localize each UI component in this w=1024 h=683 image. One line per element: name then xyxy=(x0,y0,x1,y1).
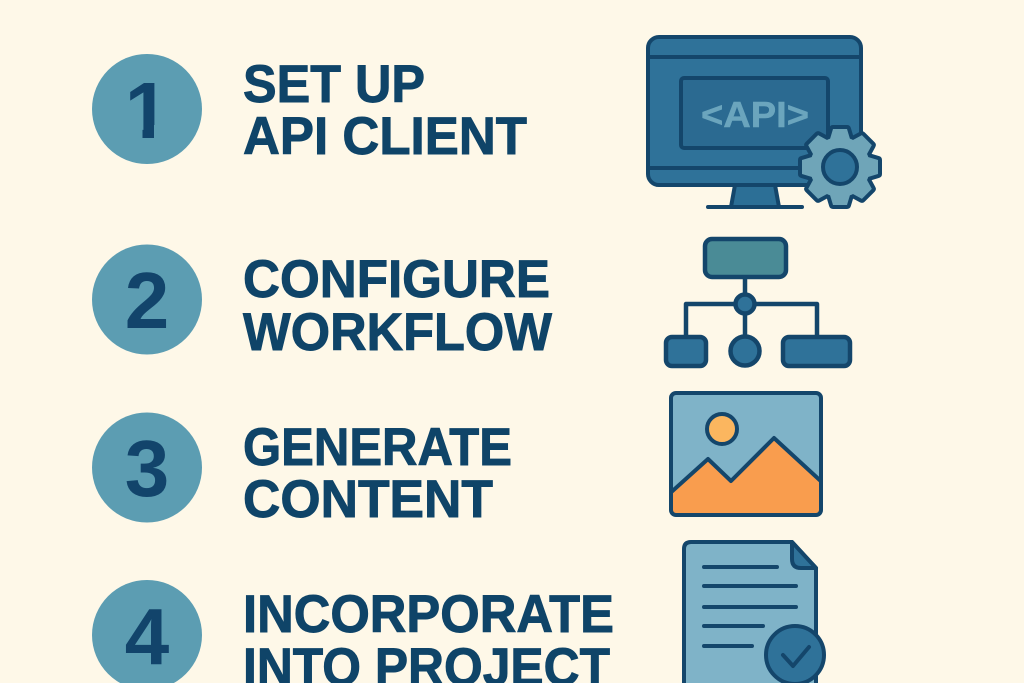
number badge 4: 4 xyxy=(125,592,170,681)
heading: set up api client: API CLIENT xyxy=(243,107,527,166)
heading: configure workflow: WORKFLOW xyxy=(243,303,552,362)
number badge 2 xyxy=(92,244,202,354)
step 1 xyxy=(92,37,878,207)
check badge xyxy=(766,626,824,683)
middle node xyxy=(730,336,760,366)
number badge 2: 2 xyxy=(125,256,169,345)
api screen xyxy=(681,78,828,148)
right node xyxy=(783,337,850,366)
heading: generate content xyxy=(243,418,512,529)
icon: image placeholder xyxy=(668,393,824,520)
heading: set up api client xyxy=(243,55,527,166)
gear xyxy=(802,129,878,205)
monitor body xyxy=(648,37,861,185)
heading: generate content: GENERATE xyxy=(243,418,512,477)
connectors xyxy=(686,278,817,337)
number badge 3: 3 xyxy=(125,424,169,513)
top node xyxy=(705,239,786,277)
heading: set up api client: SET UP xyxy=(243,55,425,114)
check mark xyxy=(783,647,809,666)
step 2 xyxy=(92,239,850,366)
monitor band lines xyxy=(648,57,861,168)
folded corner xyxy=(792,542,816,568)
api label: <API> xyxy=(701,94,809,135)
icon: monitor with api and gear xyxy=(648,37,878,207)
junction xyxy=(736,294,754,314)
heading: configure workflow xyxy=(243,250,552,362)
icon: workflow diagram xyxy=(666,239,850,366)
number badge 1 xyxy=(92,54,202,164)
number badge 4 xyxy=(92,580,202,683)
mountains xyxy=(673,436,819,513)
image frame xyxy=(671,393,821,515)
text lines xyxy=(704,567,796,646)
step 4 xyxy=(92,542,824,683)
monitor stand xyxy=(708,185,802,207)
image border xyxy=(671,393,821,515)
sun xyxy=(707,414,737,444)
icon: document with check badge xyxy=(684,542,824,683)
left node xyxy=(666,337,706,366)
heading: generate content: CONTENT xyxy=(243,470,493,529)
number badge 1: 1 xyxy=(125,66,169,155)
step 3 xyxy=(92,393,824,529)
document page xyxy=(684,542,816,683)
heading: incorporate into project: INCORPORATE xyxy=(243,585,614,644)
heading: incorporate into project xyxy=(243,585,614,683)
heading: configure workflow: CONFIGURE xyxy=(243,250,550,309)
number badge 3 xyxy=(92,412,202,522)
